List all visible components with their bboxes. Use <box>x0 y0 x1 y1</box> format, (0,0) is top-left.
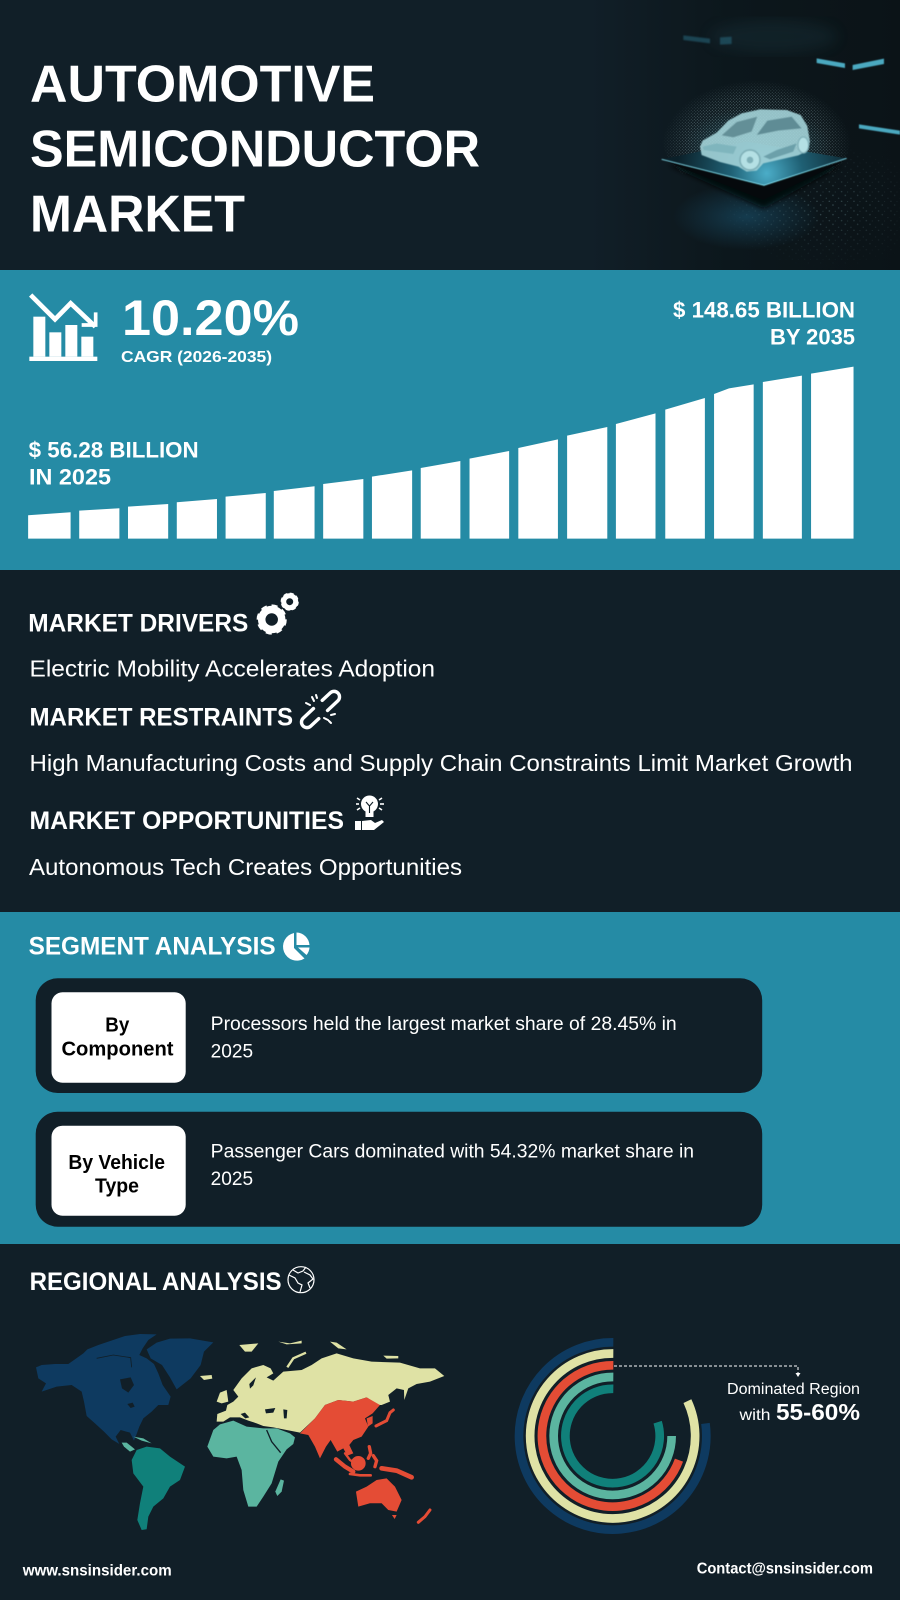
title: AUTOMOTIVE <box>30 56 375 114</box>
icon: light bulb on hand <box>355 796 384 830</box>
icon: globe <box>288 1267 314 1293</box>
region: North America <box>36 1334 213 1444</box>
icon: gears <box>258 594 298 633</box>
base year value: $ 56.28 BILLION <box>29 438 199 463</box>
panel: regional analysis <box>0 1244 900 1600</box>
text: vehicle insight <box>211 1142 694 1190</box>
hero image: car on semiconductor chip <box>661 0 900 270</box>
region: Middle East and Africa <box>122 1421 295 1507</box>
heading: market restraints: MARKET RESTRAINTS <box>30 704 293 732</box>
title: SEMICONDUCTOR <box>30 121 480 179</box>
callout: dominated region: 55-60% <box>776 1399 860 1425</box>
icon: bar chart with trend arrow <box>29 295 97 361</box>
text: opportunity: Autonomous Tech Creates Opportunities <box>29 854 462 880</box>
bar chart: market growth <box>28 367 854 539</box>
heading: market drivers: MARKET DRIVERS <box>28 610 248 638</box>
panel: market size growth <box>0 270 900 570</box>
icon: broken chain <box>299 689 342 730</box>
text: restraint: High Manufacturing Costs and Supply Chain Constraints Limit Market Growth <box>30 750 852 776</box>
forecast value <box>673 298 855 350</box>
icon: pie chart <box>283 932 310 961</box>
base year value: IN 2025 <box>29 464 111 489</box>
label box: by component <box>52 992 186 1083</box>
footer: website: www.snsinsider.com <box>22 1562 172 1579</box>
heading: segment analysis: SEGMENT ANALYSIS <box>29 932 276 960</box>
heading: regional analysis: REGIONAL ANALYSIS <box>30 1268 282 1296</box>
footer: contact: Contact@snsinsider.com <box>697 1560 873 1577</box>
world map <box>36 1334 444 1530</box>
text: component insight: Processors held the largest market share of 28.45% in <box>211 1014 677 1035</box>
callout arrow: dashed leader line <box>614 1366 800 1377</box>
label box: by component: By <box>105 1015 130 1037</box>
CAGR value: 10.20% <box>122 290 299 346</box>
panel: drivers, restraints, opportunities <box>0 570 900 912</box>
card: by component <box>36 978 762 1093</box>
text: vehicle insight: 2025 <box>211 1169 253 1190</box>
label box: by component: Component <box>62 1039 174 1061</box>
label box: by vehicle type: Type <box>95 1176 139 1198</box>
forecast value: $ 148.65 BILLION <box>673 298 855 323</box>
CAGR label: CAGR (2026-2035) <box>121 349 272 366</box>
forecast value: BY 2035 <box>770 325 855 350</box>
callout: dominated region <box>727 1381 860 1425</box>
callout: dominated region: with <box>738 1407 770 1424</box>
callout: dominated region: Dominated Region <box>727 1381 860 1398</box>
region: Europe and Russia <box>200 1341 444 1433</box>
panel: segment analysis <box>0 912 900 1244</box>
label box: by vehicle type <box>52 1126 186 1216</box>
title <box>30 56 480 244</box>
panel: header <box>0 0 900 270</box>
label box: by vehicle type: By Vehicle <box>68 1152 165 1174</box>
text: component insight: 2025 <box>211 1041 253 1062</box>
title: MARKET <box>30 186 245 244</box>
region: South America <box>132 1447 185 1530</box>
region: Asia Pacific <box>300 1397 430 1522</box>
text: component insight <box>211 1014 677 1062</box>
donut chart: regional share rings <box>519 1342 706 1530</box>
card: by vehicle type <box>36 1112 762 1227</box>
base year value <box>29 438 199 489</box>
text: vehicle insight: Passenger Cars dominated with 54.32% market share in <box>211 1142 694 1163</box>
heading: market opportunities: MARKET OPPORTUNITIES <box>30 807 344 835</box>
text: driver: Electric Mobility Accelerates Adoption <box>30 656 435 682</box>
